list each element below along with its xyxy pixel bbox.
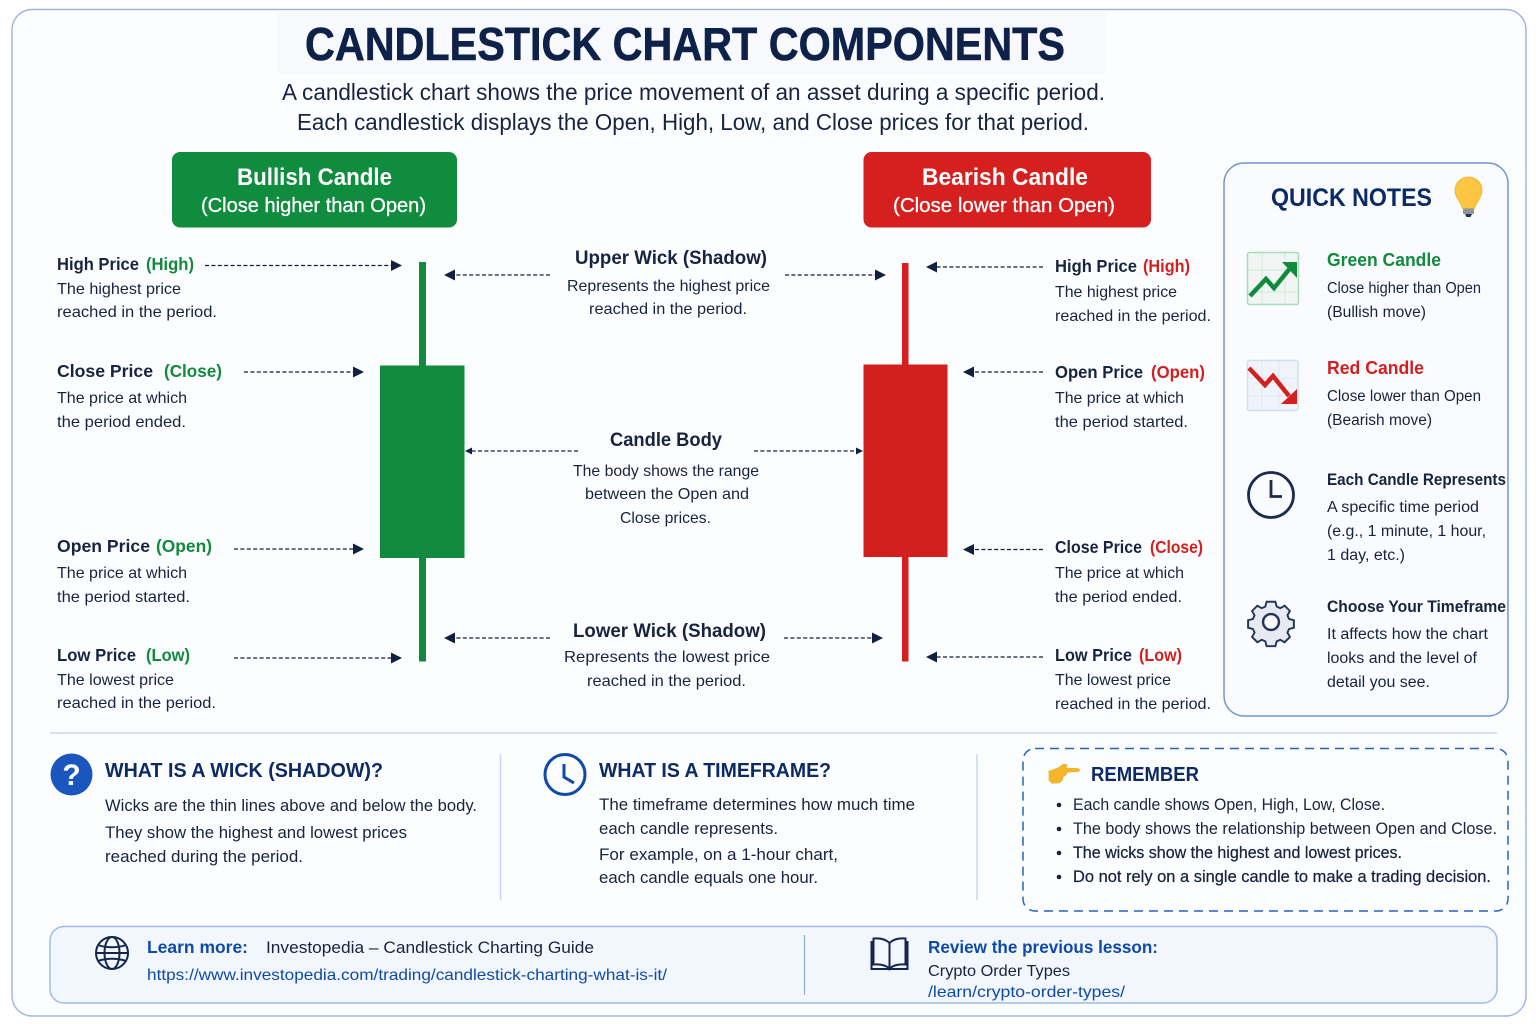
bearish labels xyxy=(926,256,1211,713)
green candle note: Green Candle xyxy=(1327,250,1441,270)
label: high price bearish: The highest price xyxy=(1055,284,1177,301)
label: candle body xyxy=(573,430,759,527)
arrow: open price bullish xyxy=(234,544,364,554)
icon: question mark: ? xyxy=(62,759,81,792)
bullish candlestick xyxy=(380,262,464,662)
learn more text: Learn more: xyxy=(147,937,248,957)
label: upper wick: Upper Wick (Shadow) xyxy=(575,248,767,269)
icon: red chart xyxy=(1248,360,1298,410)
red candle note: Close lower than Open xyxy=(1327,388,1481,405)
arrows: upper wick xyxy=(444,270,886,280)
timeframe text: For example, on a 1-hour chart, xyxy=(599,846,838,864)
wick heading: WHAT IS A WICK (SHADOW)? xyxy=(105,760,383,782)
panel: remember xyxy=(1023,748,1508,911)
learn more text: Investopedia – Candlestick Charting Guide xyxy=(266,939,594,957)
label: open price bullish: (Open) xyxy=(156,536,212,556)
label: high price bullish: (High) xyxy=(146,254,194,274)
remember list: Each candle shows Open, High, Low, Close. xyxy=(1073,796,1385,814)
icon: question mark xyxy=(50,754,92,796)
label: close price bearish: (Close) xyxy=(1150,537,1203,557)
arrow: low price bullish xyxy=(234,652,402,664)
panel: quick notes xyxy=(1224,163,1508,716)
subtitle: Each candlestick displays the Open, High, Low, and Close prices for that period. xyxy=(297,109,1089,135)
previous lesson text xyxy=(928,937,1158,1001)
subtitle: A candlestick chart shows the price movement of an asset during a specific period. xyxy=(282,79,1105,105)
choose your timeframe note xyxy=(1327,598,1506,691)
remember list: The body shows the relationship between Open and Close. xyxy=(1073,820,1497,838)
arrow: low price bearish xyxy=(926,652,1043,662)
label: low price bearish xyxy=(1055,645,1211,713)
arrows: lower wick xyxy=(444,632,883,644)
label: low price bearish: reached in the period. xyxy=(1055,696,1211,713)
red candle note xyxy=(1327,358,1481,429)
red candle note: Red Candle xyxy=(1327,358,1424,378)
red candle note: (Bearish move) xyxy=(1327,412,1432,429)
label: close price bearish: The price at which xyxy=(1055,565,1184,582)
label: open price bullish: the period started. xyxy=(57,589,190,606)
label: high price bearish xyxy=(1055,256,1211,325)
subtitle xyxy=(282,79,1105,135)
label: candle body: The body shows the range xyxy=(573,463,759,480)
bullish candle header: Bullish Candle xyxy=(237,164,392,191)
previous lesson text: Review the previous lesson: xyxy=(928,937,1158,957)
label: high price bullish: High Price xyxy=(57,254,139,274)
label: low price bullish: reached in the period. xyxy=(57,695,216,712)
label: high price bullish: reached in the period. xyxy=(57,304,217,321)
previous lesson text: /learn/crypto-order-types/ xyxy=(928,984,1126,1001)
label: open price bullish xyxy=(57,536,212,606)
bullish candle header: (Close higher than Open) xyxy=(201,194,426,217)
label: low price bullish: Low Price xyxy=(57,645,136,665)
panel: footer links xyxy=(50,926,1497,1003)
label: low price bearish: Low Price xyxy=(1055,645,1132,665)
remember heading: REMEMBER xyxy=(1091,764,1200,786)
wick text: Wicks are the thin lines above and below the body. xyxy=(105,797,477,815)
label: close price bullish xyxy=(57,361,222,431)
label: lower wick: reached in the period. xyxy=(587,673,746,690)
wick text: They show the highest and lowest prices xyxy=(105,824,407,842)
label: close price bearish: the period ended. xyxy=(1055,589,1182,606)
label: open price bearish: Open Price xyxy=(1055,362,1143,382)
bearish candle header: Bearish Candle xyxy=(922,164,1088,191)
wick text xyxy=(105,797,477,866)
label: candle body: Close prices. xyxy=(620,510,711,527)
arrow: open price bearish xyxy=(963,366,1043,378)
green candle note: (Bullish move) xyxy=(1327,304,1426,321)
timeframe text: each candle equals one hour. xyxy=(599,869,818,887)
label: close price bullish: Close Price xyxy=(57,361,153,381)
green candle note: Close higher than Open xyxy=(1327,280,1481,297)
wick text: reached during the period. xyxy=(105,848,303,866)
label: close price bearish xyxy=(1055,537,1203,606)
center labels xyxy=(444,248,886,690)
previous lesson text: Crypto Order Types xyxy=(928,963,1070,980)
learn more text xyxy=(147,937,668,984)
each candle represents note: 1 day, etc.) xyxy=(1327,547,1405,564)
each candle represents note: (e.g., 1 minute, 1 hour, xyxy=(1327,523,1486,540)
label: open price bullish: Open Price xyxy=(57,536,150,556)
label: close price bullish: the period ended. xyxy=(57,414,186,431)
label: low price bullish xyxy=(57,645,216,712)
remember list xyxy=(1057,796,1497,886)
timeframe text: each candle represents. xyxy=(599,820,778,838)
bearish candle header xyxy=(864,152,1151,228)
bearish candlestick xyxy=(864,263,948,662)
label: high price bullish xyxy=(57,254,217,321)
icon: clock xyxy=(1248,472,1294,518)
label: open price bearish xyxy=(1055,362,1205,431)
learn more text: https://www.investopedia.com/trading/candlestick-charting-what-is-it/ xyxy=(147,967,668,984)
label: open price bearish: the period started. xyxy=(1055,414,1188,431)
label: low price bearish: The lowest price xyxy=(1055,672,1171,689)
remember list: The wicks show the highest and lowest prices. xyxy=(1073,844,1402,862)
timeframe text: The timeframe determines how much time xyxy=(599,796,915,814)
label: close price bullish: (Close) xyxy=(164,361,222,381)
label: open price bearish: The price at which xyxy=(1055,390,1184,407)
label: upper wick: reached in the period. xyxy=(589,301,747,318)
choose your timeframe note: looks and the level of xyxy=(1327,650,1478,667)
label: low price bearish: (Low) xyxy=(1139,645,1182,665)
label: close price bearish: Close Price xyxy=(1055,537,1142,557)
bullish candle header xyxy=(172,152,457,228)
arrow: high price bearish xyxy=(926,262,1043,272)
arrows: candle body xyxy=(465,448,863,454)
remember list: Do not rely on a single candle to make a trading decision. xyxy=(1073,868,1491,886)
label: high price bearish: (High) xyxy=(1143,256,1190,276)
label: upper wick: Represents the highest price xyxy=(567,278,770,295)
timeframe text xyxy=(599,796,915,887)
panel: what is a timeframe xyxy=(545,754,915,887)
icon: book xyxy=(872,938,908,970)
bearish candle header: (Close lower than Open) xyxy=(893,194,1115,217)
label: lower wick xyxy=(564,621,770,690)
label: low price bullish: The lowest price xyxy=(57,672,174,689)
icon: timeframe clock xyxy=(545,754,585,794)
icon: globe xyxy=(96,937,128,969)
label: lower wick: Lower Wick (Shadow) xyxy=(573,621,766,642)
arrow: close price bullish xyxy=(244,366,364,378)
choose your timeframe note: Choose Your Timeframe xyxy=(1327,598,1506,616)
each candle represents note: Each Candle Represents xyxy=(1327,471,1506,489)
label: close price bullish: The price at which xyxy=(57,390,187,407)
icon: gear xyxy=(1248,602,1294,646)
panel: what is a wick xyxy=(50,754,477,866)
label: high price bullish: The highest price xyxy=(57,281,181,298)
each candle represents note: A specific time period xyxy=(1327,499,1479,516)
label: upper wick xyxy=(567,248,770,318)
label: low price bullish: (Low) xyxy=(146,645,190,665)
green candle note xyxy=(1327,250,1481,321)
label: candle body: Candle Body xyxy=(610,430,722,451)
icon: light bulb xyxy=(1455,177,1482,217)
label: high price bearish: High Price xyxy=(1055,256,1137,276)
timeframe heading: WHAT IS A TIMEFRAME? xyxy=(599,760,831,782)
arrow: high price bullish xyxy=(205,260,402,271)
choose your timeframe note: It affects how the chart xyxy=(1327,626,1489,643)
title: CANDLESTICK CHART COMPONENTS xyxy=(305,18,1065,70)
label: high price bearish: reached in the period. xyxy=(1055,308,1211,325)
arrow: close price bearish xyxy=(963,544,1043,555)
choose your timeframe note: detail you see. xyxy=(1327,674,1430,691)
icon: green chart xyxy=(1248,252,1298,304)
label: open price bullish: The price at which xyxy=(57,565,187,582)
label: candle body: between the Open and xyxy=(585,486,749,503)
bullish labels xyxy=(57,254,402,712)
icon: pointing hand xyxy=(1049,764,1080,783)
label: lower wick: Represents the lowest price xyxy=(564,649,770,666)
each candle represents note xyxy=(1327,471,1506,564)
quick notes heading: QUICK NOTES xyxy=(1271,184,1432,212)
label: open price bearish: (Open) xyxy=(1151,362,1205,382)
